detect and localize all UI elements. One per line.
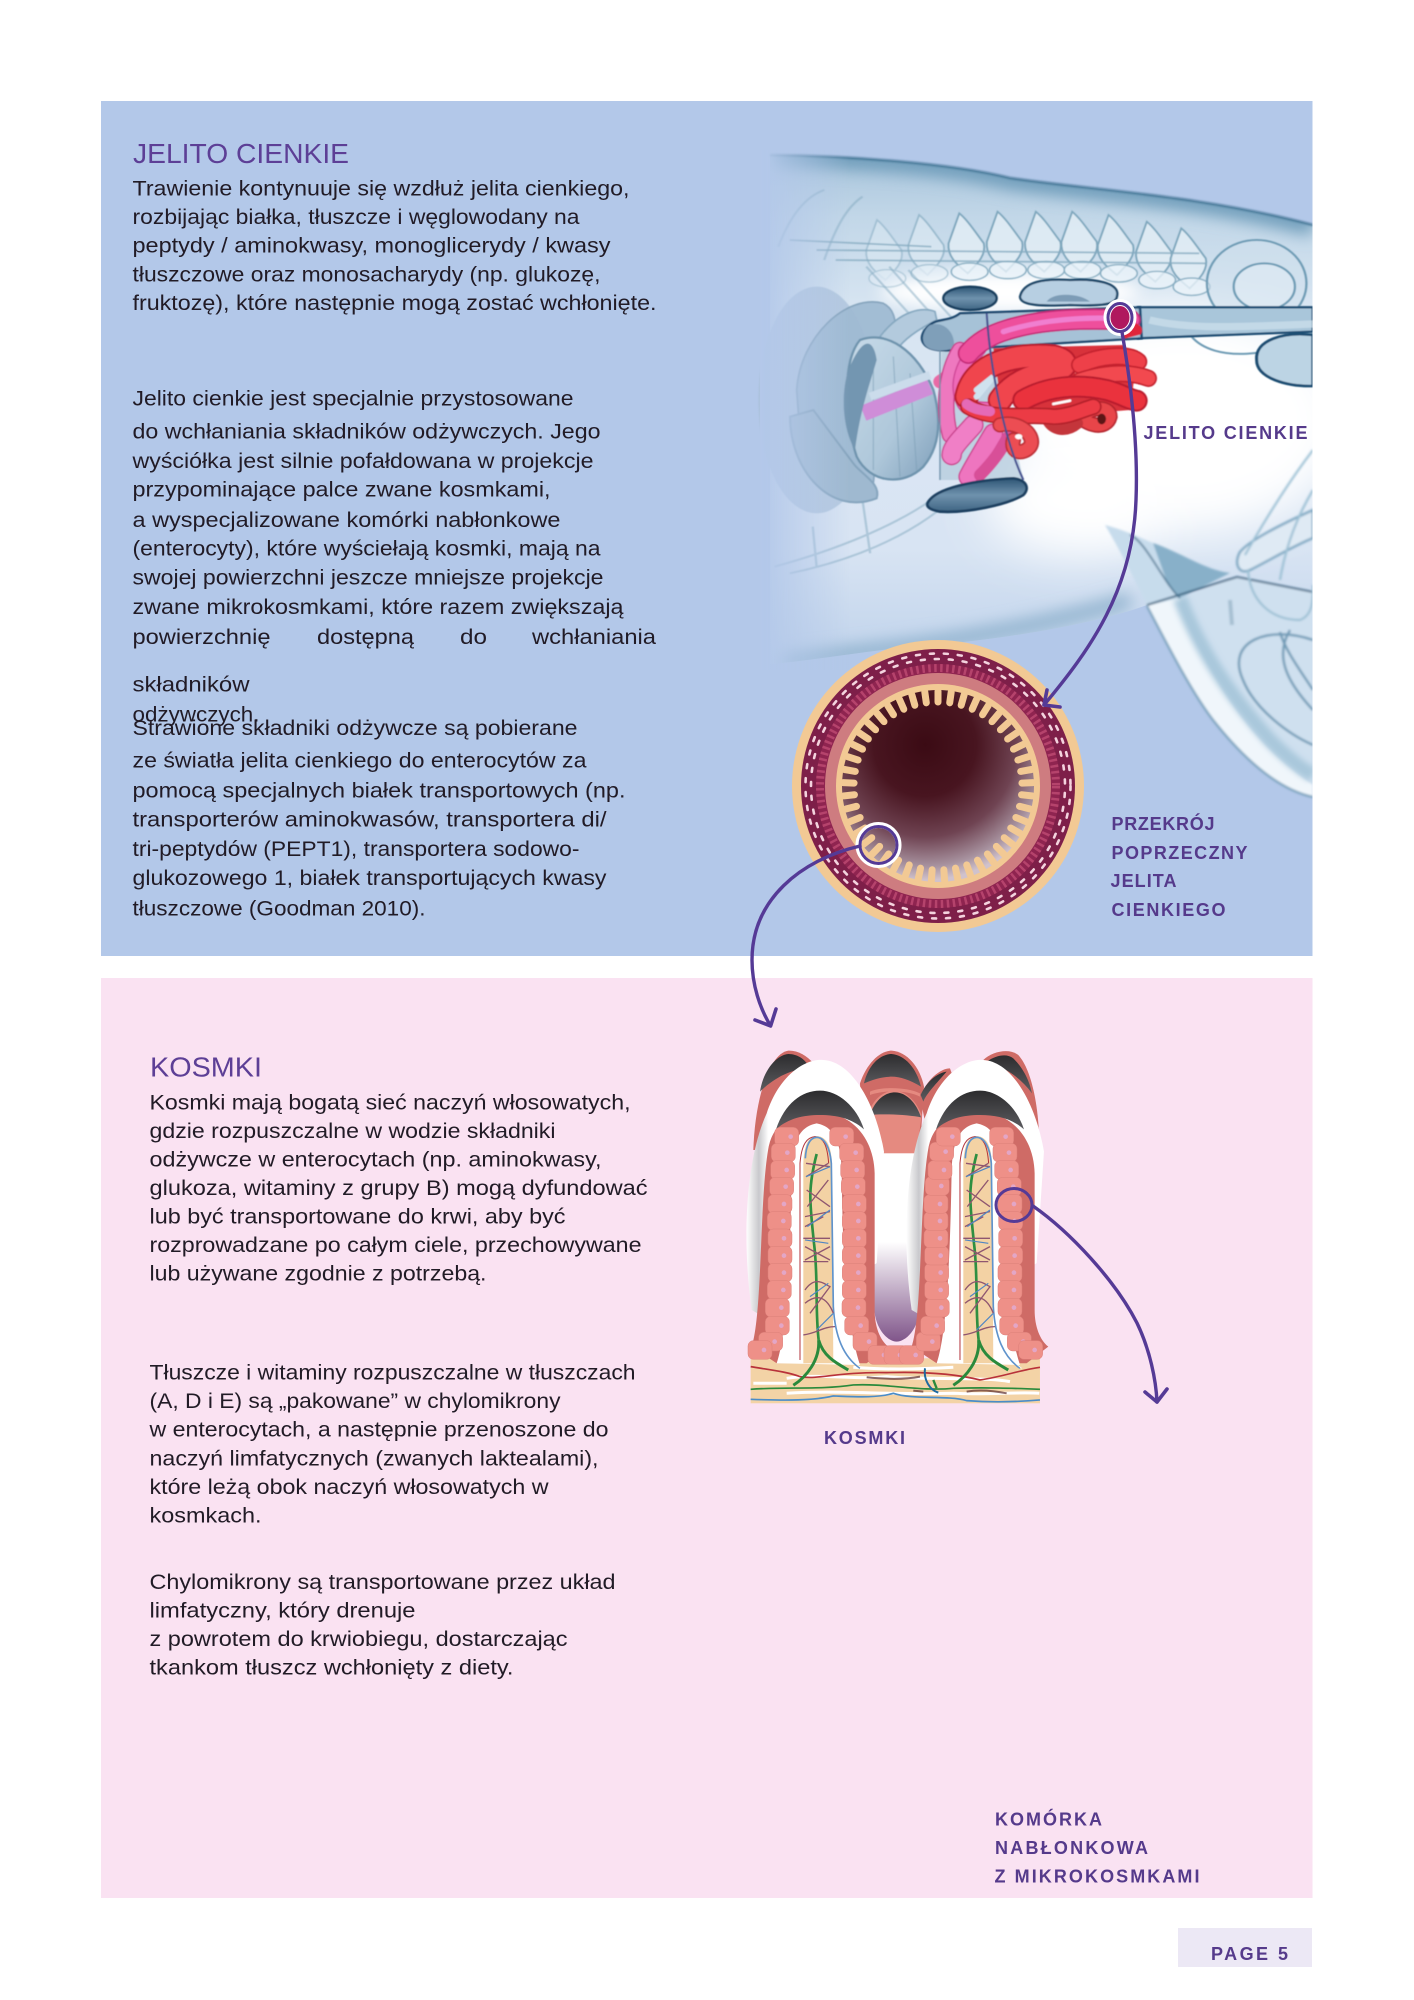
illustration: villi <box>746 1051 1048 1403</box>
text block: transport proteins paragraph: Strawione składniki odżywcze są pobierane <box>132 717 578 740</box>
text block: villi adaptation paragraph: powierzchnię <box>132 626 270 649</box>
base tissue layer <box>751 1358 1040 1403</box>
heading: jelito cienkie: JELITO CIENKIE <box>133 138 349 169</box>
text block: villi adaptation paragraph: przypominające palce zwane kosmkami, <box>132 478 550 502</box>
label: cross-section: CIENKIEGO <box>1112 900 1226 920</box>
bottom disc and cone edges <box>927 313 1027 512</box>
text block: villi adaptation paragraph: (enterocyty), które wyściełają kosmki, mają na <box>132 538 601 560</box>
illustration: dog anatomy with small intestine <box>758 150 1350 797</box>
text block: villi adaptation paragraph: składników <box>132 674 250 696</box>
text block: villi adaptation paragraph: a wyspecjalizowane komórki nabłonkowe <box>132 509 560 532</box>
text block: villi adaptation paragraph: wyściółka jest silnie pofałdowana w projekcje <box>131 450 594 473</box>
text block: transport proteins paragraph <box>132 717 626 920</box>
text block: lymphatic paragraph: z powrotem do krwiobiegu, dostarczając <box>150 1628 568 1651</box>
text block: digestion paragraph: rozbijając białka, tłuszcze i węglowodany na <box>132 206 580 229</box>
illustration: hind leg <box>1105 450 1313 797</box>
text block: capillaries paragraph: lub używane zgodnie z potrzebą. <box>150 1262 486 1286</box>
text block: chylomicrons paragraph: naczyń limfatycznych (zwanych laktealami), <box>150 1448 598 1470</box>
text block: digestion paragraph: peptydy / aminokwasy, monoglicerydy / kwasy <box>132 234 611 258</box>
text block: chylomicrons paragraph: kosmkach. <box>150 1504 262 1528</box>
text block: chylomicrons paragraph: które leżą obok naczyń włosowatych w <box>150 1476 549 1499</box>
pelvis <box>1192 240 1313 354</box>
text block: lymphatic paragraph: tkankom tłuszcz wchłonięty z diety. <box>150 1656 514 1680</box>
colon right <box>1138 307 1313 338</box>
text block: villi adaptation paragraph: zwane mikrokosmkami, które razem zwiększają <box>132 596 624 619</box>
text block: chylomicrons paragraph: Tłuszcze i witaminy rozpuszczalne w tłuszczach <box>150 1362 636 1384</box>
label: cross-section: PRZEKRÓJ <box>1112 813 1214 834</box>
text block: digestion paragraph: fruktozę), które następnie mogą zostać wchłonięte. <box>132 292 656 315</box>
page number tag <box>1178 1928 1312 1967</box>
arrow: from cross-section to villi <box>752 825 898 1026</box>
text block: transport proteins paragraph: pomocą specjalnych białek transportowych (np. <box>132 780 626 802</box>
central gap between villi <box>874 1153 919 1342</box>
stomach <box>844 337 938 480</box>
arrow: from intestine to cross-section <box>1044 302 1136 707</box>
text block: villi adaptation paragraph: odżywczych. <box>132 704 260 726</box>
text block: digestion paragraph: Trawienie kontynuuje się wzdłuż jelita cienkiego, <box>132 178 630 200</box>
text block: villi adaptation paragraph: do wchłaniania składników odżywczych. Jego <box>132 420 600 444</box>
text block: capillaries paragraph: gdzie rozpuszczalne w wodzie składniki <box>150 1120 556 1143</box>
text block: capillaries paragraph: lub być transportowane do krwi, aby być <box>150 1206 566 1228</box>
label: kosmki: KOSMKI <box>824 1428 905 1448</box>
text block: capillaries paragraph: glukoza, witaminy z grupy B) mogą dyfundować <box>150 1177 648 1200</box>
text block: capillaries paragraph: odżywcze w enterocytach (np. aminokwasy, <box>150 1148 602 1172</box>
liver and lobes <box>758 287 937 513</box>
label: epithelial cell <box>994 1808 1200 1886</box>
text block: villi adaptation paragraph: do <box>460 626 487 649</box>
heading: kosmki: KOSMKI <box>150 1052 262 1082</box>
red small intestine loops <box>967 345 1148 452</box>
villi fingers of the cross-section <box>843 691 1033 881</box>
text block: villi adaptation paragraph: Jelito cienkie jest specjalnie przystosowane <box>132 388 574 410</box>
illustration: intestine cross-section <box>792 640 1084 932</box>
text block: chylomicrons paragraph: (A, D i E) są „pakowane” w chylomikrony <box>150 1390 561 1413</box>
page number tag: PAGE 5 <box>1211 1944 1288 1964</box>
label: cross-section: POPRZECZNY <box>1112 843 1248 863</box>
spine <box>774 190 1210 573</box>
fade of anatomy image into panel <box>760 152 842 663</box>
text block: capillaries paragraph: Kosmki mają bogatą sieć naczyń włosowatych, <box>150 1092 630 1114</box>
text block: lymphatic paragraph: limfatyczny, który drenuje <box>150 1600 416 1622</box>
text block: transport proteins paragraph: ze światła jelita cienkiego do enterocytów za <box>132 750 587 772</box>
text block: capillaries paragraph: rozprowadzane po całym ciele, przechowywane <box>150 1234 642 1257</box>
enterocyte cells <box>748 1127 1043 1364</box>
text block: transport proteins paragraph: glukozowego 1, białek transportujących kwasy <box>132 867 607 890</box>
pink lower intestine <box>940 348 1008 477</box>
arrow: from villi to enterocyte <box>996 1188 1167 1402</box>
back villi <box>753 1051 1039 1153</box>
pink duodenum <box>968 318 1139 353</box>
text block: transport proteins paragraph: transporterów aminokwasów, transportera di/ <box>132 808 607 832</box>
text block: lymphatic paragraph <box>150 1571 616 1680</box>
front villi <box>746 1060 1048 1385</box>
text block: transport proteins paragraph: tłuszczowe (Goodman 2010). <box>132 898 426 920</box>
label: epithelial cell: NABŁONKOWA <box>995 1838 1148 1858</box>
text block: lymphatic paragraph: Chylomikrony są transportowane przez układ <box>150 1571 616 1594</box>
text block: digestion paragraph: tłuszczowe oraz monosacharydy (np. glukozę, <box>132 264 600 286</box>
text block: villi adaptation paragraph: dostępną <box>317 626 414 649</box>
transparent cone <box>940 348 1022 480</box>
label: epithelial cell: Z MIKROKOSMKAMI <box>994 1866 1200 1886</box>
text block: digestion paragraph <box>132 178 656 315</box>
text block: transport proteins paragraph: tri-peptydów (PEPT1), transportera sodowo- <box>132 838 580 861</box>
text block: villi adaptation paragraph <box>131 388 656 726</box>
text block: villi adaptation paragraph: wchłaniania <box>531 626 656 649</box>
panel: jelito cienkie background <box>101 101 1312 956</box>
label: epithelial cell: KOMÓRKA <box>995 1808 1102 1830</box>
text block: villi adaptation paragraph: swojej powierzchni jeszcze mniejsze projekcje <box>132 566 604 590</box>
label: jelito cienkie: JELITO CIENKIE <box>1144 423 1308 443</box>
label: cross-section: JELITA <box>1110 871 1176 891</box>
label: cross-section <box>1110 813 1248 920</box>
panel: kosmki background <box>101 978 1312 1898</box>
kidney blobs and colon <box>922 280 1142 351</box>
text block: capillaries paragraph <box>150 1092 648 1286</box>
text block: chylomicrons paragraph <box>148 1362 636 1528</box>
text block: chylomicrons paragraph: w enterocytach, a następnie przenoszone do <box>148 1418 609 1442</box>
